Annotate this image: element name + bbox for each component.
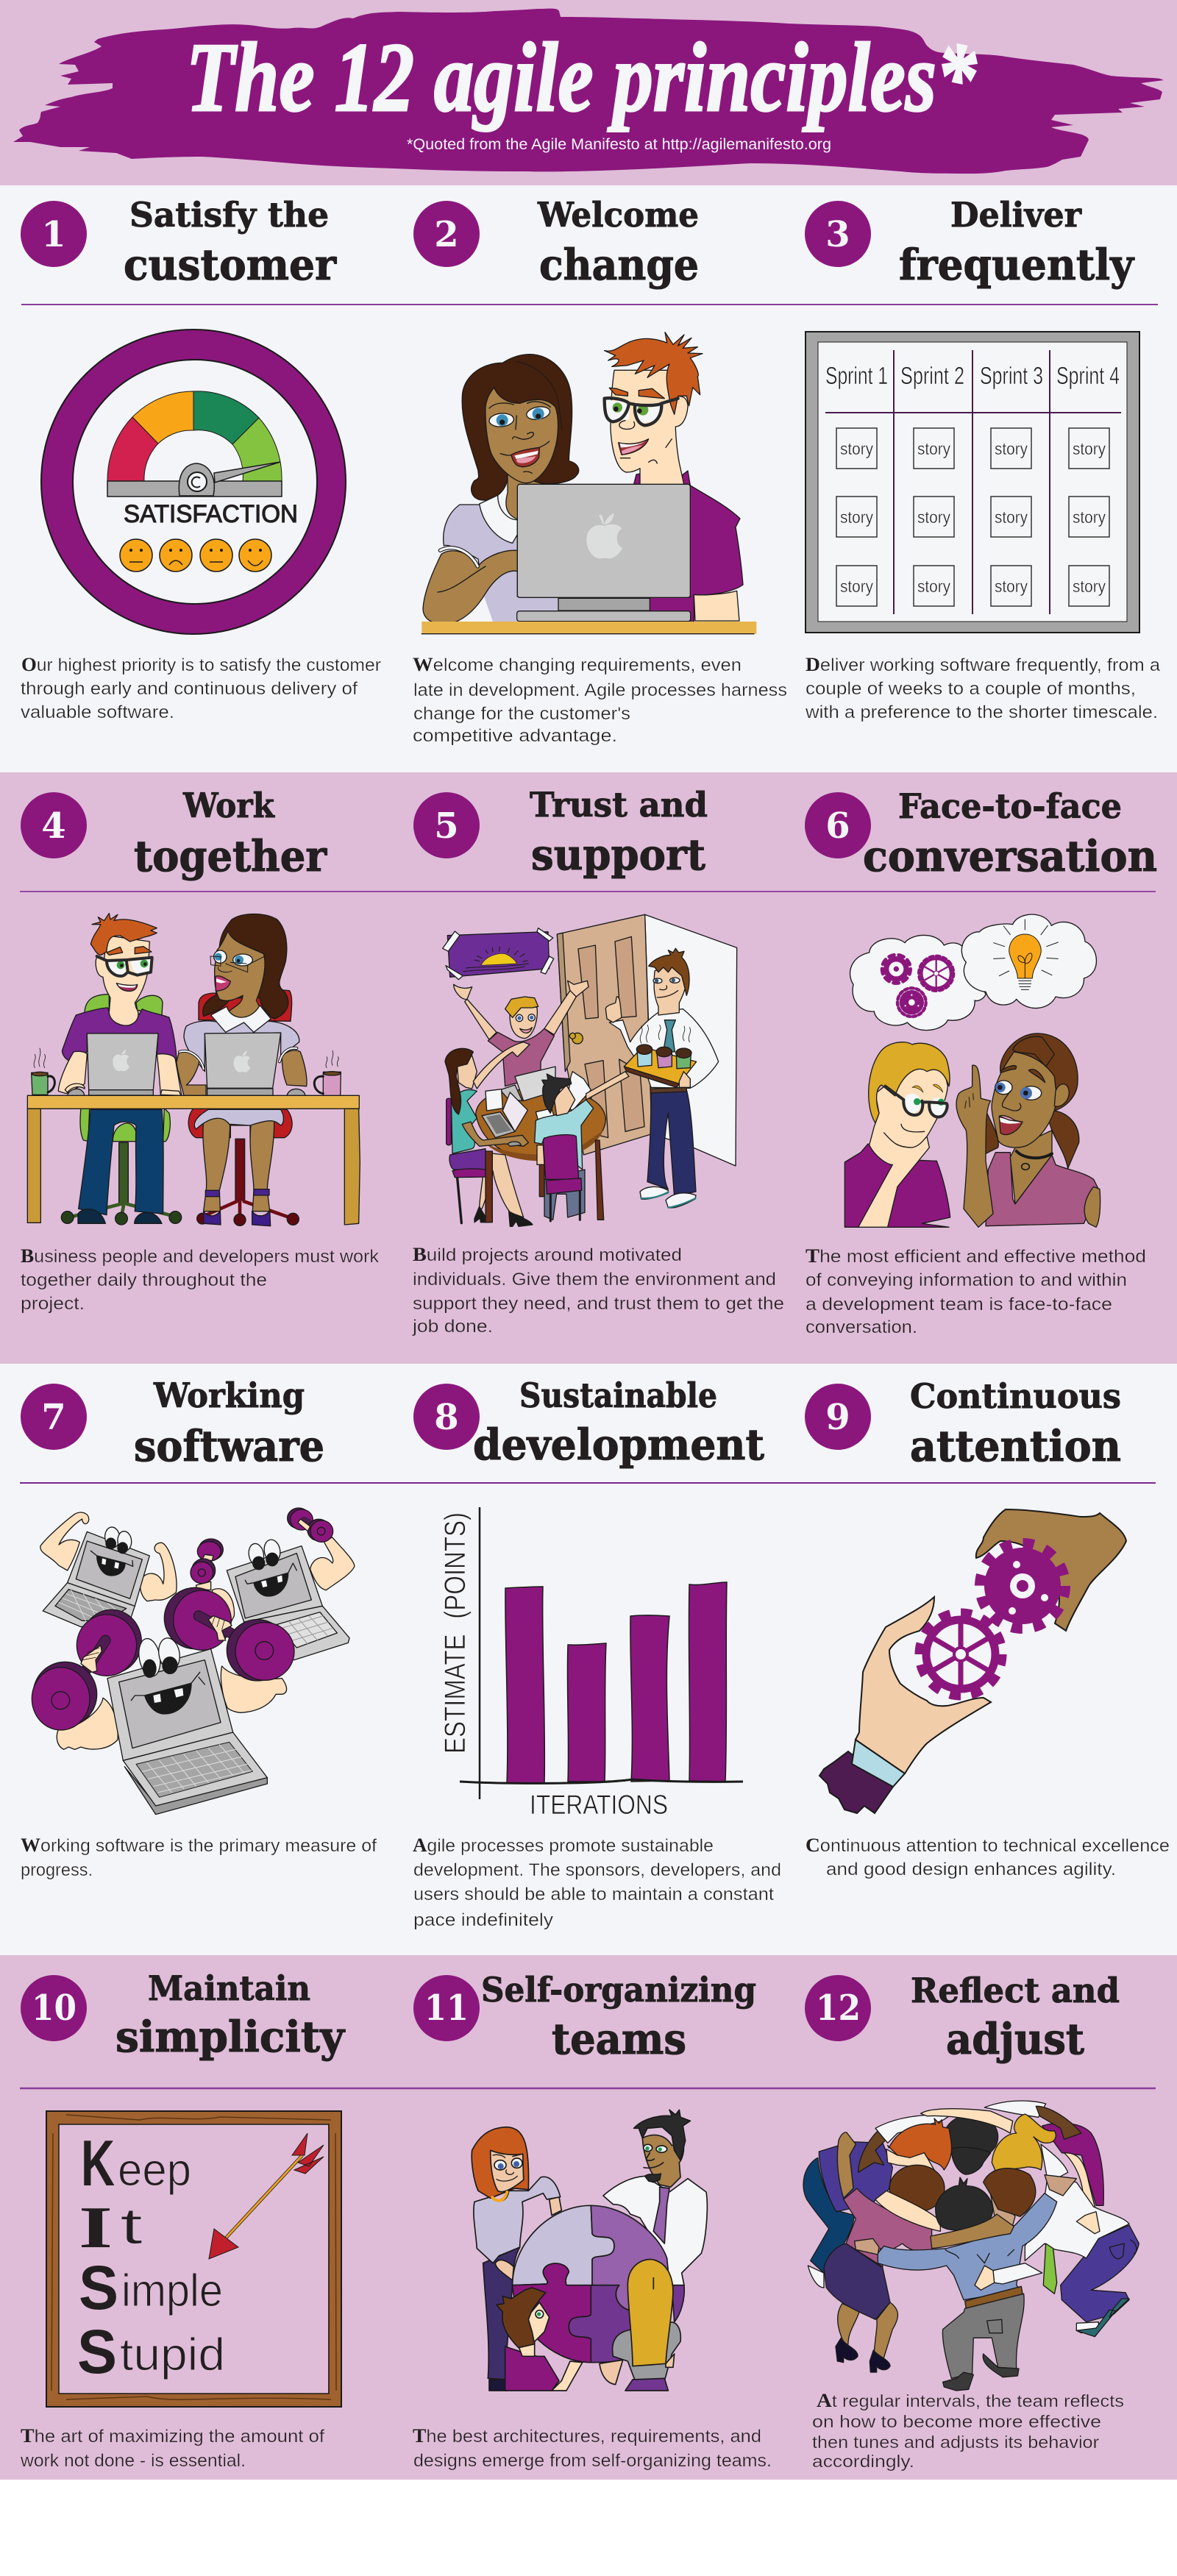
heading: continuous attention: attention — [910, 1421, 1121, 1471]
icon: satisfaction gauge: SATISFACTION — [124, 500, 298, 528]
text block: The most efficient and effective method — [806, 1245, 1146, 1267]
illustration: KISS board with arrow: tupid — [120, 2330, 225, 2380]
section band: principles 7 to 9 — [0, 1364, 1177, 1955]
text block: work not done - is essential. — [20, 2451, 246, 2471]
text block: project. — [21, 1294, 85, 1314]
heading: reflect and adjust — [911, 1971, 1120, 2064]
illustration: sprint board: story — [1073, 439, 1106, 458]
number badge 3 — [805, 201, 871, 267]
heading: satisfy the customer — [124, 195, 337, 290]
section band: principles 4 to 6 — [0, 772, 1177, 1364]
text block: designs emerge from self-organizing teams. — [413, 2451, 772, 2471]
number badge 2 — [413, 201, 480, 267]
text block — [21, 1835, 377, 1880]
number badge 8 — [413, 1384, 480, 1450]
illustration: sprint board — [806, 332, 1139, 633]
text block: users should be able to maintain a constant — [413, 1885, 774, 1904]
heading: maintain simplicity: simplicity — [115, 2012, 346, 2062]
illustration: KISS board with arrow: t — [120, 2197, 143, 2255]
illustration: sprint board: Sprint 3 — [980, 362, 1043, 389]
number badge 9: 9 — [825, 1397, 850, 1438]
heading: reflect and adjust: adjust — [946, 2014, 1084, 2064]
heading: trust and support: Trust and — [530, 785, 708, 825]
panel: principle 4 — [21, 786, 380, 1314]
heading: welcome change — [537, 195, 699, 290]
heading: self-organizing teams — [481, 1970, 756, 2064]
illustration: team assembling a jigsaw — [472, 2110, 707, 2391]
heading: maintain simplicity: Maintain — [148, 1968, 310, 2008]
number badge 4: 4 — [41, 805, 66, 847]
text block — [412, 1244, 784, 1337]
panel: principle 6 — [805, 786, 1157, 1337]
illustration: sprint board: story — [1073, 577, 1106, 596]
heading: satisfy the customer: Satisfy the — [129, 195, 329, 235]
text block: Business people and developers must work — [21, 1245, 380, 1267]
text block: The art of maximizing the amount of — [21, 2425, 324, 2447]
text block: accordingly. — [812, 2452, 914, 2471]
text block: Deliver working software frequently, from a — [806, 654, 1161, 675]
illustration: sprint board: story — [840, 439, 873, 458]
text block — [413, 2425, 772, 2471]
text block: job done. — [412, 1317, 493, 1337]
heading: work together: Work — [182, 786, 275, 825]
text block — [21, 1245, 380, 1314]
number badge 7 — [21, 1384, 87, 1450]
text block: late in development. Agile processes harness — [413, 680, 787, 700]
number badge 10 — [21, 1975, 87, 2041]
text block: conversation. — [806, 1317, 917, 1337]
text block: competitive advantage. — [413, 726, 617, 746]
heading: deliver frequently: Deliver — [950, 195, 1082, 235]
illustration: sprint board: story — [995, 577, 1028, 596]
illustration: sprint board: Sprint 2 — [900, 362, 964, 389]
heading: work together: together — [134, 831, 327, 881]
source note: *Quoted from the Agile Manifesto at http://agilemanifesto.org — [407, 136, 831, 153]
heading: welcome change: Welcome — [537, 195, 699, 235]
panel: principle 11 — [413, 1970, 772, 2471]
heading: deliver frequently — [899, 195, 1135, 290]
illustration: KISS board with arrow: I — [79, 2196, 113, 2260]
number badge 5 — [413, 792, 480, 858]
number badge 11 — [413, 1975, 480, 2041]
text block — [20, 2425, 324, 2471]
text block — [805, 654, 1161, 722]
heading: self-organizing teams: teams — [552, 2014, 686, 2064]
text block: individuals. Give them the environment and — [413, 1270, 776, 1289]
text block — [413, 1835, 781, 1930]
text block: progress. — [21, 1860, 93, 1880]
illustration: KISS board with arrow: K — [81, 2127, 115, 2199]
heading: sustainable development — [473, 1376, 764, 1470]
number badge 11: 11 — [424, 1988, 469, 2029]
heading: continuous attention: Continuous — [910, 1376, 1121, 1416]
heading: trust and support — [530, 785, 708, 880]
illustration: sprint board: story — [840, 508, 873, 527]
text block: Working software is the primary measure of — [21, 1835, 377, 1856]
illustration: two people at a laptop — [422, 332, 756, 634]
illustration: sprint board: Sprint 4 — [1056, 362, 1120, 389]
text block: support they need, and trust them to get the — [413, 1294, 784, 1314]
heading: deliver frequently: frequently — [899, 240, 1135, 290]
illustration: team huddle — [803, 2101, 1139, 2391]
panel: principle 3 — [805, 195, 1161, 722]
text block: valuable software. — [21, 702, 174, 722]
illustration: KISS board with arrow: S — [77, 2317, 117, 2386]
illustration: two hands holding gears — [819, 1509, 1126, 1813]
number badge 12: 12 — [816, 1988, 861, 2029]
illustration: two people with thought bubbles — [844, 914, 1100, 1227]
text block: pace indefinitely — [413, 1910, 553, 1930]
text block: The best architectures, requirements, and — [413, 2425, 761, 2447]
panel: principle 9 — [805, 1376, 1170, 1879]
text block: then tunes and adjusts its behavior — [812, 2433, 1099, 2452]
paint brush banner — [13, 9, 1164, 174]
icon: satisfaction gauge — [41, 330, 346, 634]
heading: face-to-face conversation: conversation — [863, 831, 1157, 881]
text block: Build projects around motivated — [413, 1244, 682, 1265]
heading: continuous attention — [910, 1376, 1121, 1471]
heading: working software: software — [134, 1421, 324, 1471]
illustration: sprint board: story — [917, 508, 950, 527]
illustration: KISS board with arrow: eep — [118, 2145, 191, 2196]
bar chart: burndown estimate by iteration — [439, 1507, 743, 1820]
heading: sustainable development: Sustainable — [519, 1376, 717, 1415]
heading: welcome change: change — [539, 240, 699, 290]
text block: Welcome changing requirements, even — [413, 654, 742, 675]
section band: principles 10 to 12 — [0, 1955, 1177, 2480]
number badge 8: 8 — [434, 1397, 459, 1438]
text block: and good design enhances agility. — [826, 1860, 1116, 1879]
illustration: sprint board: story — [917, 577, 950, 596]
heading: self-organizing teams: Self-organizing — [481, 1970, 756, 2010]
illustration: sprint board: story — [840, 577, 873, 596]
text block — [806, 1245, 1146, 1337]
panel: principle 12 — [803, 1971, 1139, 2471]
number badge 4 — [21, 792, 87, 858]
text block: Continuous attention to technical excellence — [806, 1835, 1170, 1856]
bar chart: burndown estimate by iteration: ESTIMATE (POINTS) — [439, 1512, 472, 1754]
number badge 6 — [805, 792, 871, 858]
heading: reflect and adjust: Reflect and — [911, 1971, 1120, 2010]
panel: principle 8 — [413, 1376, 781, 1930]
header band — [0, 0, 1177, 185]
number badge 1: 1 — [41, 214, 66, 255]
text block: on how to become more effective — [812, 2412, 1101, 2431]
heading: working software — [134, 1376, 324, 1471]
illustration: muscular laptops lifting dumbbells — [32, 1508, 355, 1815]
panel: principle 2 — [413, 195, 787, 746]
illustration: sprint board: story — [995, 508, 1028, 527]
text block: together daily throughout the — [21, 1270, 267, 1290]
number badge 1 — [21, 201, 87, 267]
heading: face-to-face conversation: Face-to-face — [898, 786, 1122, 826]
heading: trust and support: support — [531, 830, 705, 880]
number badge 10: 10 — [32, 1988, 77, 2029]
text block: of conveying information to and within — [806, 1270, 1127, 1290]
title: The 12 agile principles* — [186, 23, 977, 132]
number badge 12 — [805, 1975, 871, 2041]
illustration: sprint board: story — [995, 439, 1028, 458]
number badge 5: 5 — [434, 805, 459, 847]
text block: At regular intervals, the team reflects — [817, 2390, 1124, 2411]
panel: principle 5 — [412, 785, 784, 1337]
illustration: sprint board: story — [917, 439, 950, 458]
heading: face-to-face conversation — [863, 786, 1157, 881]
heading: maintain simplicity — [115, 1968, 346, 2062]
illustration: KISS board with arrow — [46, 2111, 341, 2407]
number badge 3: 3 — [825, 214, 850, 255]
text block — [806, 1835, 1170, 1879]
text block: development. The sponsors, developers, and — [413, 1860, 781, 1880]
heading: satisfy the customer: customer — [124, 240, 337, 290]
heading: work together — [134, 786, 327, 881]
text block: through early and continuous delivery of — [21, 679, 358, 699]
number badge 7: 7 — [41, 1397, 66, 1438]
text block: couple of weeks to a couple of months, — [806, 679, 1136, 699]
number badge 9 — [805, 1384, 871, 1450]
section band: principles 1 to 3 — [0, 185, 1177, 772]
illustration: two people working side by side — [27, 914, 360, 1226]
text block — [413, 654, 787, 746]
illustration: KISS board with arrow: imple — [121, 2266, 223, 2316]
illustration: team with door and coffee — [443, 914, 737, 1226]
text block: Our highest priority is to satisfy the customer — [21, 654, 381, 675]
text block: with a preference to the shorter timescale. — [805, 702, 1158, 722]
text block: a development team is face-to-face — [806, 1295, 1112, 1314]
bar chart: burndown estimate by iteration: ITERATIONS — [530, 1790, 668, 1820]
illustration: KISS board with arrow: S — [79, 2253, 118, 2322]
text block — [21, 654, 381, 722]
illustration: sprint board: Sprint 1 — [825, 362, 888, 389]
text block: Agile processes promote sustainable — [413, 1835, 714, 1856]
number badge 2: 2 — [434, 214, 459, 255]
illustration: sprint board: story — [1073, 508, 1106, 527]
text block — [812, 2390, 1124, 2471]
panel: principle 1 — [21, 195, 381, 722]
panel: principle 10 — [20, 1968, 346, 2471]
number badge 6: 6 — [825, 805, 850, 847]
heading: working software: Working — [153, 1376, 305, 1415]
text block: change for the customer's — [413, 704, 630, 724]
heading: sustainable development: development — [473, 1420, 764, 1470]
panel: principle 7 — [21, 1376, 377, 1880]
